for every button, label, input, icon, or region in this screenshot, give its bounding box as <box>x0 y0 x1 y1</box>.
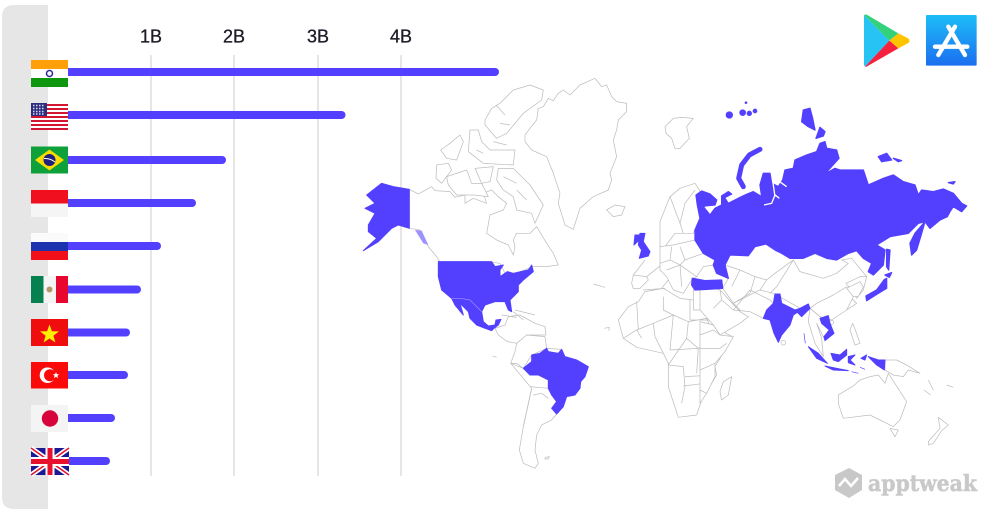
map: gray country outlines, south america and africa <box>493 260 733 468</box>
map: highlighted Russia, Turkey, Japan <box>692 102 967 301</box>
axis labels: 1B <box>140 26 162 46</box>
map: gray country outlines, europe and asia <box>660 117 867 310</box>
map: highlighted Alaska and UK <box>363 183 650 258</box>
map: gray country outlines, southern asia, oceania <box>700 282 953 445</box>
flag: United Kingdom <box>31 448 69 475</box>
bar: India <box>60 68 499 76</box>
logo: apptweak watermark <box>835 468 978 498</box>
axis labels: 4B <box>390 26 412 46</box>
bar: United States <box>60 111 346 119</box>
icon: App Store <box>926 15 977 66</box>
world map <box>363 78 967 468</box>
flag: India <box>31 60 68 87</box>
bar: Turkey <box>60 371 128 379</box>
map: white inlets in Russia <box>764 173 787 205</box>
bar: Mexico <box>60 286 141 294</box>
flag: United States <box>31 103 68 130</box>
icon: Google Play <box>864 14 909 67</box>
flag: Russia <box>31 233 68 260</box>
axis labels: 2B <box>223 26 245 46</box>
map: highlighted USA, Mexico and Brazil <box>438 262 588 414</box>
bar: Vietnam <box>60 328 130 336</box>
flag: Indonesia <box>31 190 68 217</box>
bar: United Kingdom <box>60 457 110 465</box>
logo wordmark: apptweak <box>868 471 978 497</box>
logo mark <box>835 468 862 498</box>
flag: Vietnam <box>31 319 68 346</box>
bar: Brazil <box>60 156 226 164</box>
bar: Russia <box>60 242 161 250</box>
flag: Mexico <box>31 276 68 303</box>
axis labels <box>140 26 412 46</box>
bar: Japan <box>60 414 115 422</box>
map: highlighted India, Vietnam, Indonesia <box>763 294 885 373</box>
axis labels: 3B <box>307 26 329 46</box>
flag: Japan <box>31 405 68 432</box>
bar: Indonesia <box>60 199 196 207</box>
flag: Brazil <box>31 146 68 174</box>
panel: flag column background <box>2 5 48 509</box>
map: gray country outlines, north america and greenland <box>409 78 627 277</box>
flag: Turkey <box>31 362 68 388</box>
chart gridlines <box>151 55 401 476</box>
